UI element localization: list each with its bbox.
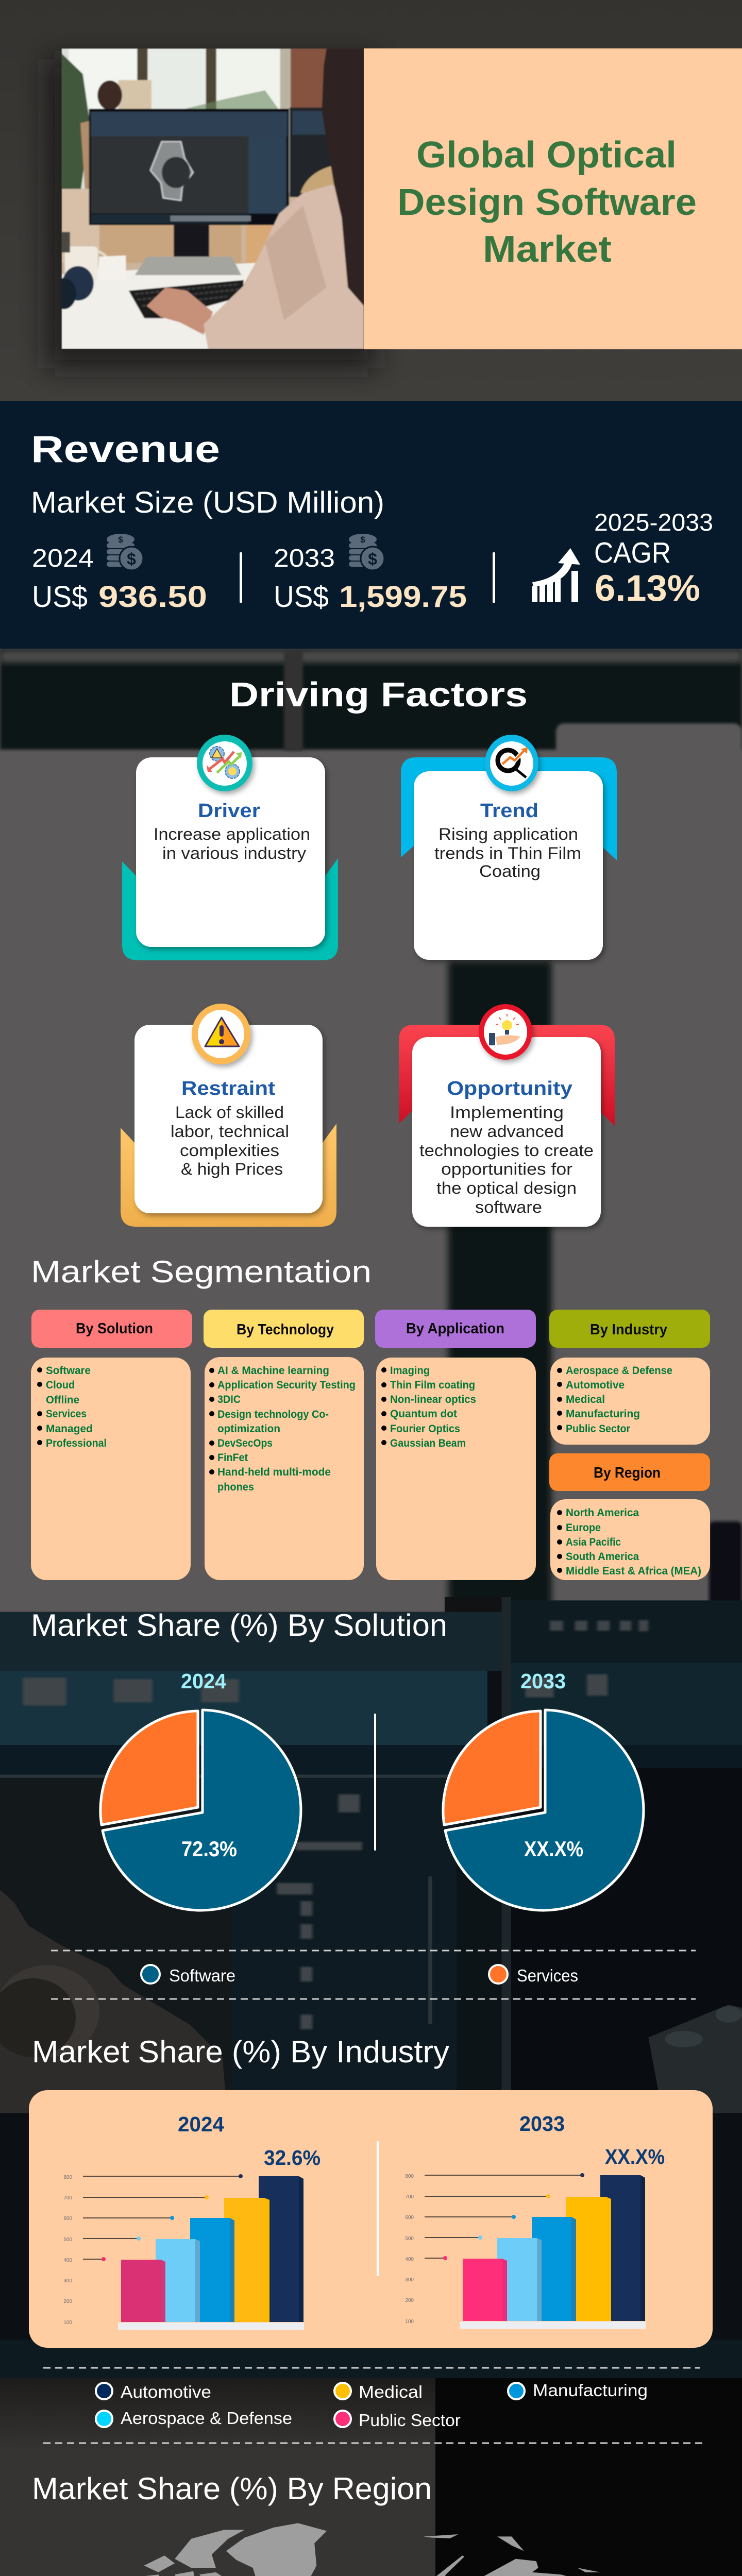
divider [374,1714,376,1851]
CAGR block: 2025-2033 [594,509,713,536]
segment column: by solution: By Solution [76,1320,153,1337]
segment column: by technology: AI & Machine learning [217,1365,329,1377]
divider [240,552,242,603]
bar chart: industry 2024: 700 [63,2195,72,2201]
segment column: by application: Thin Film coating [390,1379,475,1391]
segment column: by industry: Automotive [566,1379,625,1391]
heading: market segmentation: Market Segmentation [31,1255,372,1289]
segment column: by technology: 3DIC [217,1394,241,1405]
bar chart: industry 2033: 400 [405,2257,414,2262]
segment column: by region: Europe [566,1522,601,1534]
bar chart: industry 2024: 100 [63,2320,72,2326]
heading: market share by industry: Market Share (%) By Industry [32,2035,449,2069]
bar chart: industry 2024: 800 [63,2175,72,2180]
segment column: by industry: Aerospace & Defense [566,1365,672,1377]
icon: coins 2033 [349,534,384,570]
icon: coins 2024: $ [118,535,123,545]
bar chart: industry 2033: 700 [405,2194,414,2200]
segment column: by solution: Professional [46,1437,107,1449]
card: restraint [121,1004,336,1227]
segment column: by region: By Region [594,1465,661,1481]
segment column: by region: North America [566,1507,639,1519]
bar chart: industry 2033: 800 [405,2174,414,2179]
segment column: by technology: optimization [217,1423,280,1435]
icon: hand with light bulb [489,1014,520,1045]
header background [0,0,742,401]
bar chart: industry 2033: 300 [405,2277,414,2283]
segment column: by technology: Design technology Co- [217,1409,329,1420]
card: opportunity: opportunities for [441,1160,572,1178]
icon: coins 2033: $ [368,550,377,568]
segment column: by application: Fourier Optics [390,1423,460,1435]
segment column: by solution: Services [46,1408,87,1420]
revenue 2024: 2024 [32,545,94,572]
card: opportunity: software [475,1198,542,1216]
dashed rules [51,1951,696,1999]
card: opportunity: technologies to create [419,1141,594,1160]
CAGR block: 6.13% [595,568,700,609]
segment column: by application: Imaging [390,1365,430,1377]
title panel: Market [483,229,612,270]
card: restraint: complexities [180,1141,279,1160]
legend: industry [96,2381,648,2430]
pie chart: solution 2024: 2024 [181,1669,226,1693]
icon: coins 2024 [107,534,143,570]
CAGR block [594,509,713,609]
panel: industry charts [29,2090,713,2348]
dashed rules [43,2368,705,2443]
panel: blurred keyboard and gear background [0,2378,742,2576]
market size label: Market Size (USD Million) [31,486,384,519]
segment column: by industry: Medical [566,1394,605,1405]
legend: solution: Services [517,1966,578,1985]
card: restraint: & high Prices [181,1160,283,1178]
card: opportunity: Implementing [450,1103,564,1122]
card: restraint: Lack of skilled [175,1103,284,1122]
legend: industry: Manufacturing [533,2381,648,2400]
legend: industry: Medical [359,2382,423,2401]
legend: industry: Aerospace & Defense [121,2409,292,2428]
bar chart: industry 2033: 600 [405,2215,414,2221]
pie chart: solution 2024: 72.3% [181,1837,237,1861]
bar chart: industry 2024: 600 [63,2216,72,2222]
card: driver [122,735,338,960]
segment column: by solution: Offline [46,1394,79,1406]
segment column: by industry: Public Sector [566,1423,630,1435]
bar chart: industry 2024: 200 [63,2299,72,2304]
revenue 2033: 1,599.75 [339,580,467,614]
heading: market share by solution: Market Share (%) By Solution [31,1608,447,1642]
card: opportunity: new advanced [450,1122,564,1141]
panel: industry charts: XX.X% [605,2145,665,2168]
revenue heading: Revenue [31,429,220,470]
segment column: by technology: phones [217,1481,254,1493]
revenue 2033 [274,534,467,614]
segment column: by application: Non-linear optics [390,1394,476,1405]
segment column: by industry: Manufacturing [566,1408,640,1420]
panel: driving factors and segmentation background [0,649,742,1615]
bar chart: industry 2033: 500 [405,2236,414,2242]
legend: solution: Software [169,1966,235,1985]
legend: industry: Automotive [121,2382,211,2401]
revenue 2024: 936.50 [98,580,207,614]
segment column: by technology: Application Security Testing [217,1379,356,1391]
segment column: by region: Middle East & Africa (MEA) [566,1565,701,1577]
segment column: by industry: By Industry [590,1321,667,1338]
panel: industry charts: 32.6% [264,2146,321,2170]
panel: industry charts: 2024 [178,2112,224,2136]
card: opportunity [399,1004,615,1227]
bar chart: industry 2024: 300 [63,2278,72,2284]
bar chart: industry 2024 [63,2174,304,2330]
segment column: by region: Asia Pacific [566,1536,621,1548]
card: driver: Increase application [154,825,310,843]
segment column: by application: Quantum dot [390,1408,457,1420]
card: trend: Coating [479,862,541,880]
segment column: by application [375,1310,536,1580]
card: opportunity: the optical design [436,1179,577,1197]
heading: driving factors: Driving Factors [229,675,528,714]
segment column: by region [549,1453,710,1580]
heading: market share by region: Market Share (%) By Region [32,2471,432,2506]
icon: warning triangle [205,1018,239,1046]
bar chart: industry 2024: 500 [63,2237,72,2243]
title panel [364,48,742,349]
bar chart: industry 2033 [405,2173,646,2329]
card: trend: Trend [480,800,538,822]
segment column: by solution [31,1310,192,1580]
pie chart: solution 2033: XX.X% [524,1837,583,1861]
segment column: by technology: By Technology [237,1321,334,1338]
segment column: by solution: Managed [46,1423,93,1435]
legend: industry: Public Sector [359,2411,461,2430]
card: opportunity: Opportunity [447,1078,572,1099]
revenue 2024 [32,534,207,614]
segment column: by solution: Cloud [46,1379,75,1391]
bar chart: industry 2033: 200 [405,2298,414,2303]
card: trend [401,735,617,960]
revenue 2033: 2033 [274,545,335,572]
segment column: by application: By Application [406,1320,504,1337]
CAGR block: CAGR [594,536,671,569]
panel: revenue background [0,401,742,649]
revenue 2024: US$ [32,580,88,614]
card: driver: Driver [198,800,260,822]
card: restraint: labor, technical [171,1122,289,1141]
world map [70,2523,666,2576]
pie chart: solution 2033: 2033 [520,1669,566,1693]
panel: blurred monitor background [0,1597,742,2387]
segment column: by technology: DevSecOps [217,1437,273,1449]
bar chart: industry 2033: 100 [405,2319,414,2325]
segment column: by industry [549,1310,710,1445]
bar chart: industry 2024: 400 [63,2258,72,2263]
title panel: Global Optical [416,134,677,176]
icon: coins 2024: $ [127,550,136,568]
segment column: by technology: Hand-held multi-mode [217,1466,331,1478]
revenue 2033: US$ [274,580,329,614]
icon: coins 2033: $ [360,535,365,545]
segment column: by solution: Software [46,1365,91,1377]
header photo: engineer at CAD workstation [52,48,364,349]
segment column: by technology [204,1310,364,1580]
card: driver: in various industry [162,844,306,862]
segment column: by technology: FinFet [217,1452,248,1464]
icon: magnifier with trend arrow [498,747,528,777]
title panel: Design Software [397,182,697,223]
card: restraint: Restraint [181,1078,275,1099]
segment column: by application: Gaussian Beam [390,1437,466,1449]
divider [493,552,495,603]
icon: driver arrows and gears [207,747,242,778]
icon: growth chart arrow [532,548,580,602]
panel: industry charts: 2033 [519,2112,565,2136]
segment column: by region: South America [566,1551,639,1563]
pie chart: solution 2024 [100,1669,301,1910]
card: trend: Rising application [439,825,578,843]
card: trend: trends in Thin Film [434,844,581,862]
pie chart: solution 2033 [443,1669,644,1910]
legend: solution [141,1965,578,1985]
